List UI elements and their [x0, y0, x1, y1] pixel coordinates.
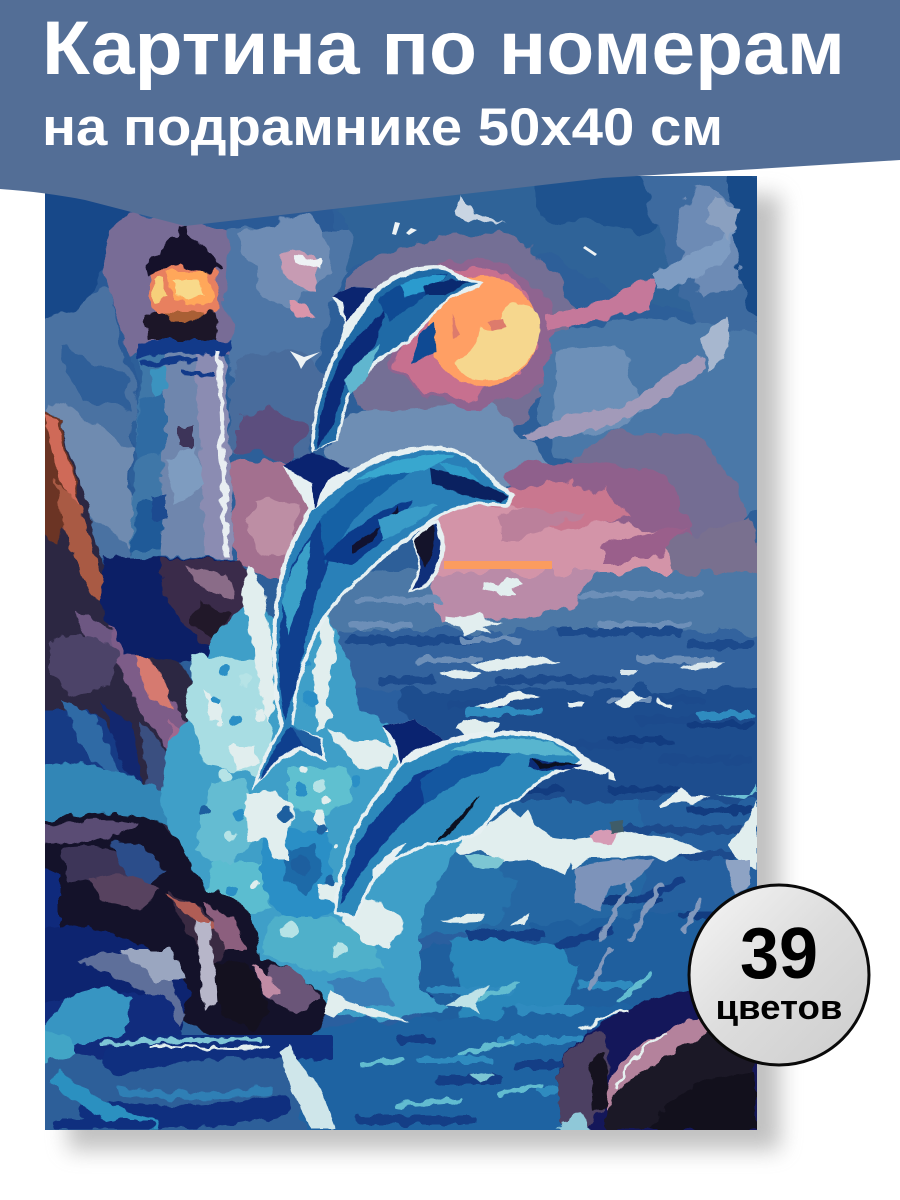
lantern gallery [145, 310, 218, 340]
dolphin middle [252, 446, 516, 790]
canvas drop shadow [68, 195, 780, 1150]
lighthouse [130, 225, 233, 558]
splash [160, 565, 500, 1020]
sea brush strokes [350, 595, 750, 1120]
white water streak [280, 990, 410, 1129]
wave crests [440, 577, 757, 1083]
left cliff [45, 412, 193, 834]
lighthouse tower [130, 350, 233, 558]
dolphin top [311, 265, 482, 452]
birds [290, 222, 597, 369]
badge: 39 colours [689, 885, 869, 1065]
bottom right rocks [555, 990, 757, 1130]
title: Картина по номерам [42, 6, 845, 91]
moon [428, 276, 540, 386]
horizon glow [444, 561, 552, 569]
badge: 39 colours: 39 [740, 914, 818, 994]
badge: 39 colours: цветов [716, 989, 842, 1027]
pink cloud streaks [290, 195, 740, 440]
sky [45, 176, 757, 579]
lantern room [150, 266, 220, 314]
roof [145, 225, 222, 276]
painting: dolphins and lighthouse [20, 160, 780, 1143]
subtitle: на подрамнике 50х40 см [42, 98, 723, 157]
foreground swirl water [60, 1039, 320, 1125]
splash mottling [198, 659, 360, 958]
lighthouse rock [100, 556, 255, 664]
dolphin bottom [334, 720, 610, 920]
pectoral fin [408, 519, 444, 592]
header banner [0, 0, 900, 226]
lower left rocks [30, 813, 330, 1065]
sea [300, 572, 780, 1140]
